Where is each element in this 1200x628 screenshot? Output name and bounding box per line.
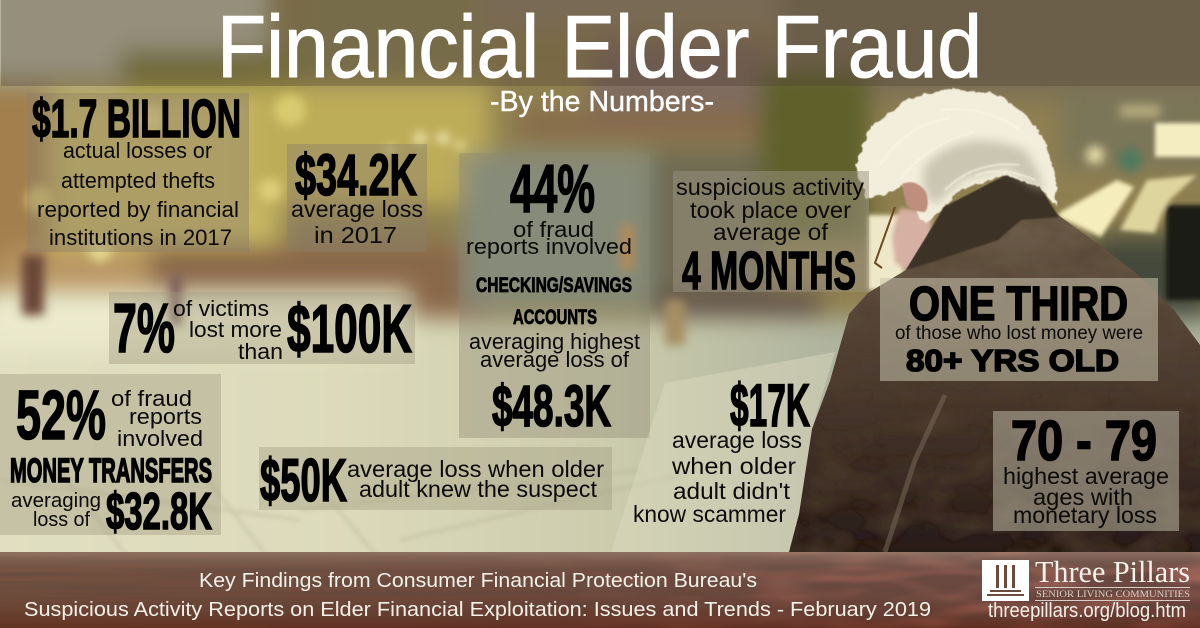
description: actual losses	[37, 138, 239, 250]
heading: checking/savings accounts: ACCOUNTS	[513, 306, 597, 329]
panel: 7% lost more than $100K	[109, 289, 415, 367]
panel: 4 months	[673, 171, 869, 301]
logo tagline: SENIOR LIVING COMMUNITIES	[1036, 590, 1190, 600]
description: highest average ages	[1003, 463, 1169, 528]
heading: money transfers: MONEY TRANSFERS	[10, 452, 212, 490]
stat: 52%: 52%	[16, 376, 106, 454]
stat: $32.8K: $32.8K	[106, 483, 212, 541]
description: average loss in 2017	[291, 196, 423, 248]
description: of victims lost more than: than	[238, 339, 283, 364]
stat: 70 - 79: 70 - 79	[1011, 409, 1157, 473]
description: averaging highest average loss	[469, 329, 640, 372]
panel: 44% checking and savings	[459, 151, 650, 439]
description: average loss: adult didn't	[673, 478, 791, 504]
stat: $1.7 billion: $1.7 BILLION	[32, 89, 241, 149]
man: glasses	[875, 207, 895, 268]
subtitle: -By the Numbers-	[490, 86, 714, 118]
description: of fraud reports involved: of fraud	[513, 217, 594, 242]
panel: $34.2K average loss	[287, 143, 427, 252]
man: sleeve seam	[885, 395, 945, 552]
description: actual losses: institutions in 2017	[49, 225, 232, 250]
logo wordmark: Three Pillars	[1035, 554, 1190, 589]
description: knew the suspect	[347, 456, 604, 502]
logo icon: pillars	[982, 560, 1029, 601]
description: actual losses: reported by financial	[37, 197, 239, 222]
description: of victims lost more than: of victims	[173, 296, 269, 321]
description: average loss in 2017: average loss	[291, 196, 423, 222]
stat: 7%: 7%	[113, 289, 175, 367]
man: jacket	[789, 175, 1200, 552]
panel: 70 - 79	[993, 409, 1179, 531]
description: of fraud reports involved: reports involved	[466, 234, 632, 259]
man: ear	[902, 182, 928, 212]
description: average loss: know scammer	[633, 501, 786, 527]
description: of fraud reports involved: of fraud	[111, 386, 192, 411]
stat: 44%: 44%	[510, 151, 595, 227]
description: suspicious activity: suspicious activity	[676, 174, 864, 200]
photo: elderly man from behind	[789, 88, 1200, 552]
heading: checking/savings accounts: CHECKING/SAVINGS	[476, 274, 632, 297]
stat: 4 months: 4 MONTHS	[682, 241, 856, 301]
logo url: threepillars.org/blog.htm	[988, 600, 1186, 622]
stat: 80+ yrs old: 80+ YRS OLD	[906, 343, 1119, 378]
footer: source text: Key Findings from Consumer Financial Protection Bureau's	[199, 570, 757, 592]
stat: $50K: $50K	[260, 447, 347, 514]
description: suspicious activity: took place over	[690, 197, 851, 223]
stat: $17K: $17K	[730, 372, 810, 439]
footer: source text	[24, 570, 931, 621]
logo: Three Pillars	[982, 554, 1190, 622]
description: knew the suspect: adult knew the suspect	[359, 476, 598, 502]
description: highest average ages: ages with	[1033, 484, 1133, 510]
panel: $1.7 billion	[27, 89, 249, 252]
description: averaging loss of: averaging	[11, 490, 101, 512]
footer: source text: Suspicious Activity Reports on Elder Financial Exploitation: Issues and Trends - February 2019	[24, 599, 931, 621]
description: highest average ages: highest average	[1003, 463, 1169, 489]
footer band: wood	[0, 552, 1200, 628]
panel: $50K knew the suspect	[259, 447, 612, 514]
stat: $48.3K: $48.3K	[492, 374, 611, 439]
description: knew the suspect: average loss when older	[347, 456, 604, 482]
description: average loss: when older	[671, 453, 796, 479]
description: average loss	[633, 427, 802, 527]
description: actual losses: attempted thefts	[61, 168, 215, 193]
description: of victims lost more than: lost more	[189, 317, 282, 342]
description: of those who lost money: of those who lost money were	[895, 323, 1143, 344]
description: of victims lost more than	[173, 296, 283, 364]
title band	[1, 0, 1200, 86]
description: averaging highest average loss: average loss of	[480, 347, 630, 372]
description: of fraud reports involved	[111, 386, 203, 451]
man: face and neck	[892, 208, 932, 272]
description: actual losses: actual losses or	[63, 138, 212, 163]
stat: $100K: $100K	[287, 291, 412, 367]
description: averaging highest average loss: averaging highest	[469, 329, 640, 354]
description: averaging loss of: loss of	[33, 509, 90, 531]
description: average loss in 2017: in 2017	[314, 222, 397, 248]
stat: one third: ONE THIRD	[909, 278, 1128, 331]
description: suspicious activity	[676, 174, 864, 245]
stat: $34.2K: $34.2K	[295, 143, 417, 208]
heading: checking/savings accounts	[476, 274, 632, 329]
man: collar	[906, 175, 1059, 270]
description: average loss: average loss	[672, 427, 802, 453]
description: of fraud reports involved: involved	[117, 426, 203, 451]
man: white hair	[856, 88, 1056, 225]
description: suspicious activity: average of	[713, 219, 829, 245]
description: averaging loss of	[11, 490, 101, 531]
panel: one third	[880, 278, 1158, 381]
description: highest average ages: monetary loss	[1013, 502, 1157, 528]
description: of fraud reports involved	[466, 217, 632, 259]
description: of fraud reports involved: reports	[129, 404, 202, 429]
panel: 52% money transfers	[0, 374, 221, 541]
panel: $17K didn't know scammer	[611, 352, 835, 552]
